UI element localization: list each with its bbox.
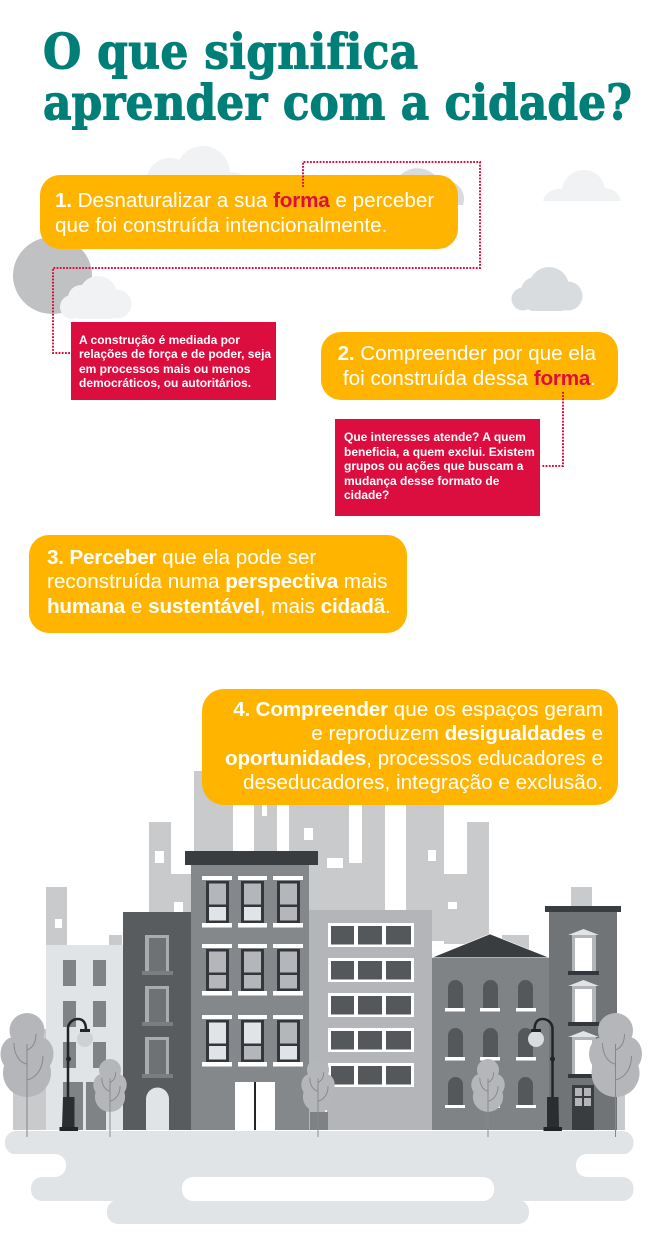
- panel: step 4: 4. Compreender que os espaços geram: [233, 698, 603, 721]
- panel: note on step 1: democráticos, ou autoritários.: [79, 376, 251, 390]
- panel: note on step 2: cidade?: [344, 488, 389, 502]
- panel: note on step 1: A construção é mediada por: [79, 333, 240, 347]
- cloud: large pale behind box 1: [146, 146, 250, 208]
- panel: note on step 2: mudança desse formato de: [344, 474, 499, 488]
- panel: step 1: que foi construída intencionalmente.: [55, 214, 387, 237]
- ground pavement: [0, 1131, 650, 1224]
- cloud: grey right: [512, 267, 582, 311]
- tree: large right: [589, 1013, 642, 1137]
- panel: note on step 1: relações de força e de poder, seja: [79, 347, 271, 361]
- cloud: grey behind box 1: [392, 168, 464, 205]
- sun circle: [13, 237, 92, 314]
- panel: step 4: deseducadores, integração e exclusão.: [243, 771, 603, 794]
- tree: small right: [471, 1059, 505, 1137]
- panel: step 1: 1. Desnaturalizar a sua forma e perceber: [55, 189, 434, 212]
- panel: step 3: humana e sustentável, mais cidadã.: [47, 595, 391, 618]
- panel: step 4: e reproduzem desigualdades e: [311, 722, 603, 745]
- panel: note on step 2: [335, 419, 540, 516]
- building: house with pitched roof: [432, 934, 549, 1130]
- panel: note on step 1: [71, 322, 276, 400]
- panel: step 3: 3. Perceber que ela pode ser: [47, 546, 316, 569]
- panel: step 1: [40, 175, 458, 249]
- panel: step 2: 2. Compreender por que ela: [338, 342, 596, 365]
- panel: step 3: reconstruída numa perspectiva mais: [47, 570, 387, 593]
- panel: step 2: [321, 332, 618, 400]
- building: main with flat roof: [185, 851, 318, 1130]
- panel: step 4: oportunidades, processos educadores e: [225, 747, 603, 770]
- city backdrop silhouettes: [13, 771, 625, 1130]
- cloud: pale top right: [543, 170, 621, 201]
- connector: step 2 to note: [541, 392, 563, 466]
- panel: note on step 1: em processos mais ou menos: [79, 362, 250, 376]
- tree: small centre: [301, 1059, 335, 1137]
- street lamp: right: [528, 1019, 562, 1131]
- connector: step 1 to note: [53, 162, 480, 353]
- panel: note on step 2: Que interesses atende? A quem: [344, 430, 526, 444]
- panel: note on step 2: grupos ou ações que buscam a: [344, 459, 523, 473]
- building: pale left: [46, 945, 123, 1130]
- title: aprender com a cidade?: [43, 75, 632, 131]
- tree: large left: [0, 1013, 54, 1137]
- street lamp: left: [60, 1019, 93, 1131]
- panel: step 4: [202, 689, 618, 805]
- panel: note on step 2: beneficia, a quem exclui. Existem: [344, 444, 535, 458]
- title: O que significa: [43, 24, 418, 80]
- cloud: pale over sun: [60, 276, 132, 319]
- tree: small left: [93, 1059, 127, 1137]
- building: light grey with wide windows: [309, 910, 432, 1130]
- title: [43, 24, 632, 131]
- panel: step 2: foi construída dessa forma.: [343, 367, 596, 390]
- building: narrow tower: [545, 906, 621, 1130]
- panel: step 3: [29, 535, 407, 633]
- building: dark narrow: [123, 912, 191, 1130]
